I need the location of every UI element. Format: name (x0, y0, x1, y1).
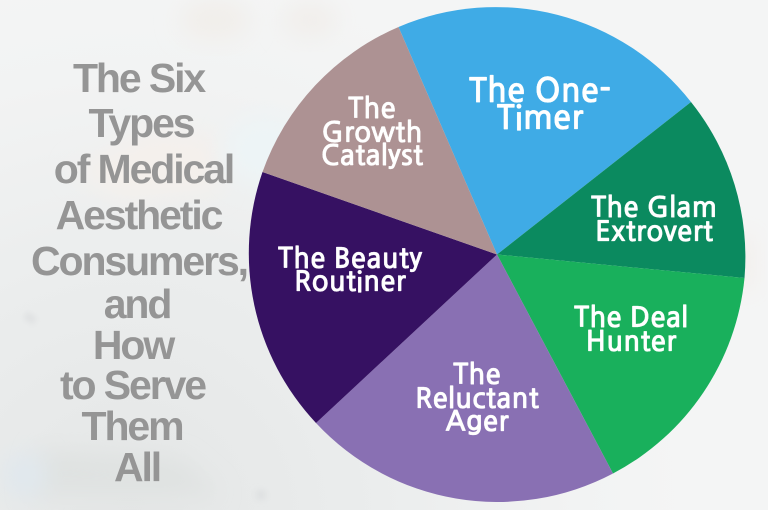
label: The Deal Hunter (574, 304, 688, 356)
label: The Beauty Routiner (278, 245, 423, 296)
title (31, 55, 247, 490)
title: Aesthetic (56, 192, 223, 238)
label: The Deal Hunter: The Deal (574, 304, 688, 332)
label: The Growth Catalyst: Catalyst (321, 142, 424, 170)
slice: The Growth Catalyst (262, 27, 497, 254)
label: The Growth Catalyst (321, 95, 424, 170)
title: and (104, 281, 170, 327)
pie chart (249, 7, 745, 502)
label: The Beauty Routiner: Routiner (294, 268, 407, 296)
label: The Reluctant Ager: The (453, 361, 501, 389)
title: Types (89, 100, 195, 146)
label: The One-Timer: Timer (497, 101, 584, 134)
title: All (114, 444, 160, 490)
slice: The Deal Hunter (497, 254, 744, 474)
label: The Beauty Routiner: The Beauty (278, 245, 423, 273)
label: The One-Timer: The One- (469, 74, 611, 107)
label: The Glam Extrovert: The Glam (591, 194, 717, 222)
title: The Six (73, 55, 206, 101)
title: Consumers, (31, 238, 247, 284)
label: The Deal Hunter: Hunter (586, 328, 677, 356)
label: The Reluctant Ager: Reluctant (415, 385, 540, 413)
label: The Reluctant Ager (415, 361, 540, 436)
slice: The Glam Extrovert (497, 102, 745, 278)
slice: The One-Timer (398, 7, 691, 255)
title: How (93, 322, 175, 368)
label: The Reluctant Ager: Ager (445, 408, 509, 436)
label: The Glam Extrovert (591, 194, 717, 246)
slice: The Beauty Routiner (249, 172, 497, 423)
label: The Growth Catalyst: The (348, 95, 396, 123)
label: The Growth Catalyst: Growth (321, 119, 423, 147)
label: The One-Timer (469, 74, 611, 134)
slice: The Reluctant Ager (316, 254, 613, 502)
title: Them (82, 403, 182, 449)
label: The Glam Extrovert: Extrovert (595, 218, 714, 246)
title: to Serve (60, 362, 206, 408)
title: of Medical (54, 146, 233, 192)
